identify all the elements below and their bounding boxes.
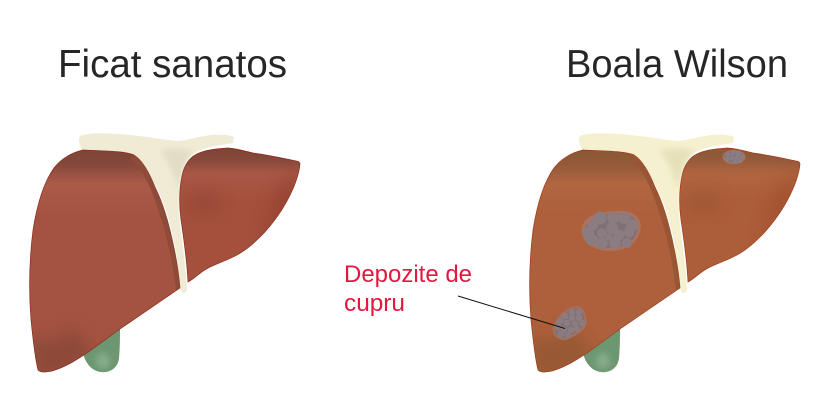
title: Wilson disease: Boala Wilson [566,43,788,86]
gallbladder [83,326,120,372]
ligament [579,133,734,293]
left lobe [525,150,680,385]
ligament [79,133,234,293]
right lobe [180,148,302,282]
illustration: Wilson disease liver [525,133,802,385]
title: healthy liver: Ficat sanatos [58,43,287,86]
arrow: leader line to deposit [458,296,565,328]
copper deposit: large centre [581,211,641,251]
callout: copper deposits label [344,261,472,317]
right lobe [680,148,802,282]
left lobe [25,150,180,385]
callout: copper deposits label: cupru [344,290,405,317]
illustration: healthy liver [25,133,302,385]
gallbladder [583,326,620,372]
copper deposit: lower left [553,306,587,340]
callout: copper deposits label: Depozite de [344,261,472,288]
copper deposit: upper right [722,150,746,164]
